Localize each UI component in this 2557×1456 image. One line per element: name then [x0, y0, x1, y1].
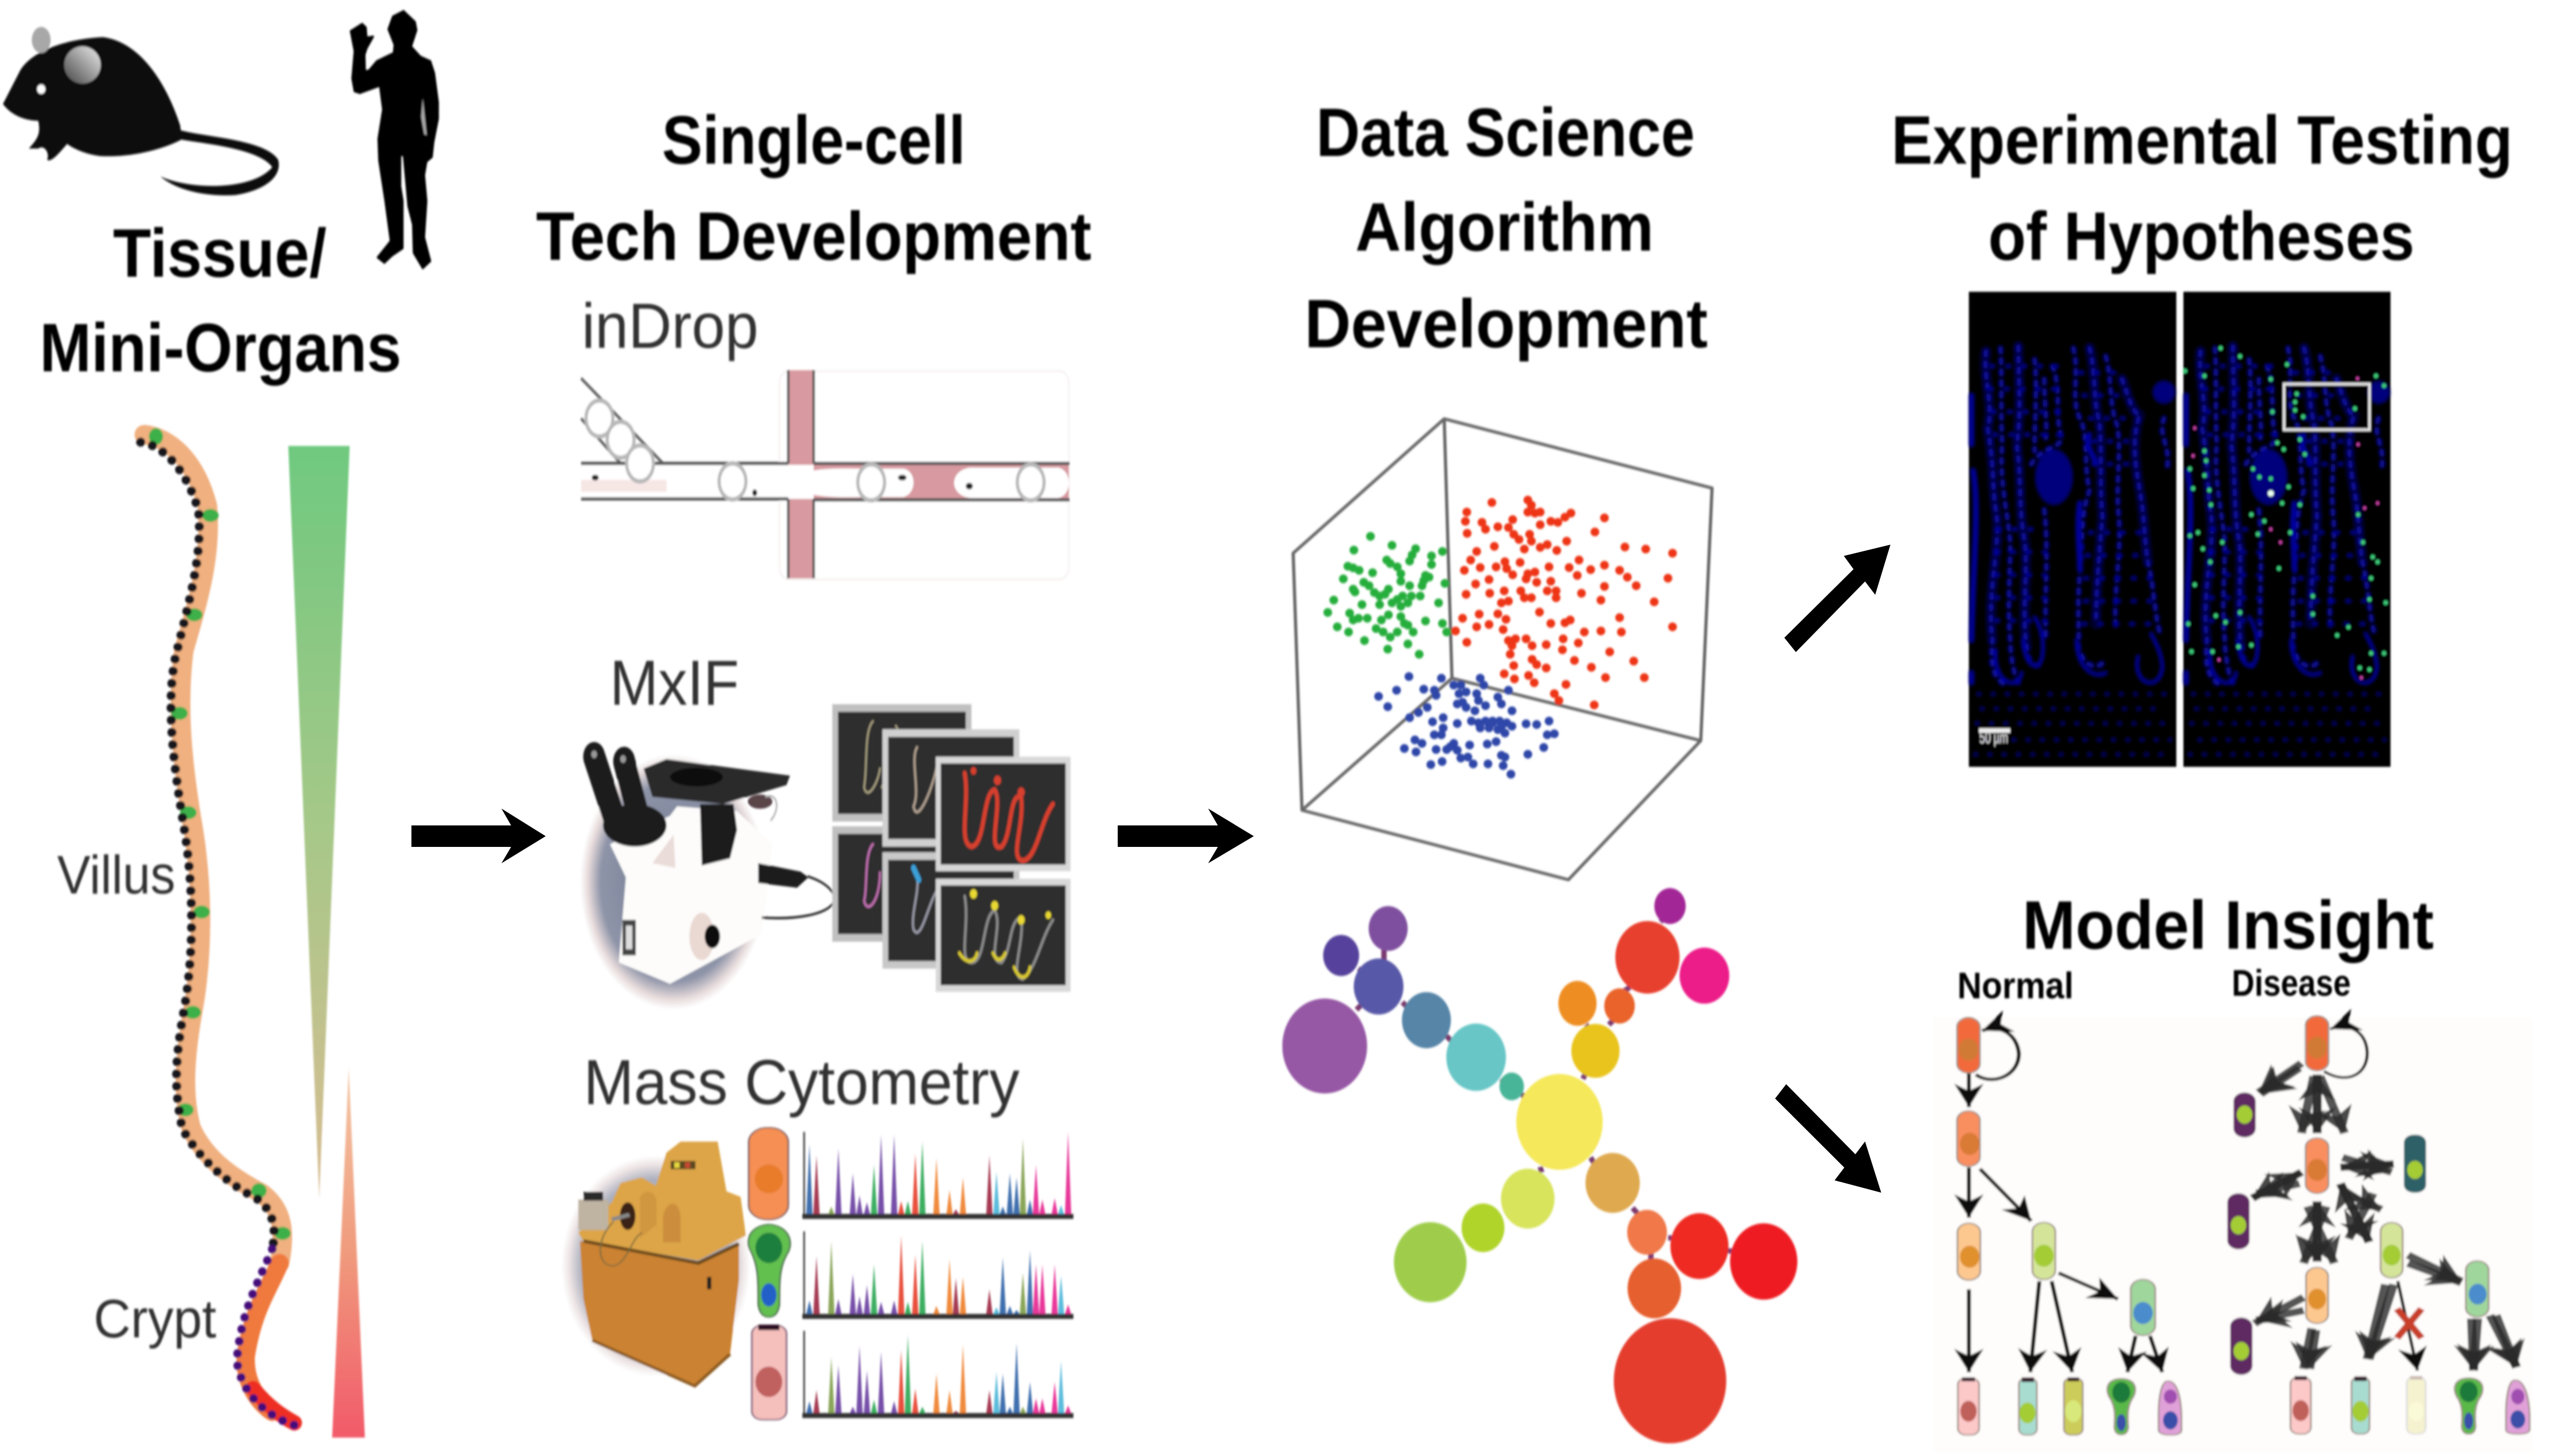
label: inDrop: inDrop	[581, 291, 758, 362]
normal lineage tree	[1957, 1018, 2182, 1435]
right image panel	[2183, 292, 2390, 767]
normal arrows	[1969, 1028, 2162, 1372]
label: villus: Villus	[57, 845, 175, 905]
scale bar text: 50 µm	[1980, 729, 2008, 747]
heading: model insight: Model Insight	[2023, 887, 2434, 964]
arrow: to experimental testing	[1784, 545, 1891, 652]
heading: single-cell: Single-cell	[662, 102, 966, 178]
cell: pink	[752, 1325, 787, 1420]
green gradient wedge	[288, 446, 350, 1198]
spectrum row 2	[802, 1231, 1073, 1319]
icon: mouse	[3, 27, 279, 195]
fluorescence microscopy image pair	[1969, 292, 2390, 767]
panel: experimental testing	[1891, 102, 2513, 767]
chart: 3D scatter plot	[1293, 419, 1712, 880]
normal cells	[1957, 1018, 2182, 1435]
panel: tissue / mini-organs	[3, 11, 438, 1438]
panel: model insight	[1933, 887, 2532, 1452]
spectrum row 1	[802, 1132, 1073, 1219]
heading: mini-organs: Mini-Organs	[40, 309, 401, 386]
label: normal: Normal	[1957, 965, 2074, 1006]
label: disease: Disease	[2232, 962, 2351, 1004]
red gradient wedge	[332, 1068, 365, 1438]
heading: tech development: Tech Development	[536, 198, 1091, 275]
cell: orange	[749, 1128, 788, 1219]
red X: blocked differentiation	[2397, 1309, 2421, 1338]
icon: inverted microscope	[580, 751, 834, 1010]
arrow: tech to algorithms	[1118, 809, 1254, 863]
left image panel	[1969, 292, 2177, 767]
heading: data science: Data Science	[1316, 94, 1695, 171]
disease cells	[2227, 1016, 2530, 1434]
panel: single-cell tech development	[536, 102, 1091, 1420]
icon: human silhouette	[351, 11, 438, 268]
label: mass cytometry: Mass Cytometry	[584, 1047, 1020, 1118]
heading: algorithm: Algorithm	[1355, 189, 1654, 265]
stacked MxIF image frames	[835, 708, 1068, 989]
red cluster	[1455, 500, 1673, 705]
chart: bubble tree network	[1282, 888, 1798, 1443]
label: MxIF: MxIF	[610, 648, 739, 719]
blue cluster	[1379, 677, 1554, 774]
heading: development: Development	[1305, 285, 1708, 362]
crypt-villus cell strand	[141, 428, 296, 1426]
panel: data science algorithm development	[1282, 94, 1798, 1443]
green cluster	[1328, 536, 1447, 654]
label: crypt: Crypt	[94, 1289, 216, 1349]
disease sharp arrows	[2324, 1027, 2417, 1371]
cell: green goblet	[748, 1224, 790, 1317]
disease fuzzy arrows	[2252, 1063, 2517, 1371]
arrow: tissue to tech	[412, 809, 546, 863]
3D box frame	[1293, 419, 1712, 880]
heading: tissue: Tissue/	[113, 215, 327, 292]
spectrum row 3	[802, 1331, 1073, 1418]
inDrop microfluidic channel	[581, 370, 1069, 579]
chart: mass spectra	[802, 1132, 1073, 1418]
heading: experimental testing: Experimental Testing	[1891, 102, 2513, 178]
disease lineage tree	[2227, 1016, 2530, 1434]
icon: mass cytometer	[562, 1141, 750, 1386]
arrow: to model insight	[1775, 1084, 1881, 1193]
heading: of hypotheses: of Hypotheses	[1988, 198, 2414, 275]
